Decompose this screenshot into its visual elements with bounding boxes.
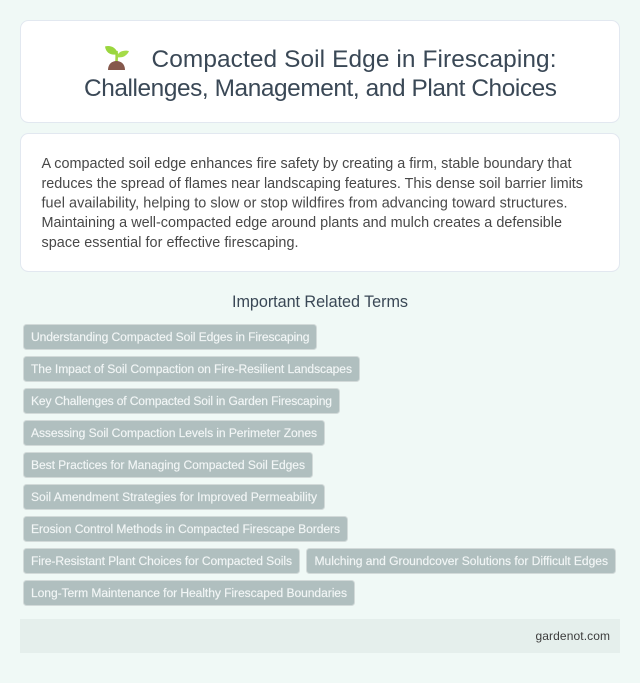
tag — [24, 420, 324, 446]
text block: description: reduces the spread of flames near landscaping features. This dense soil barrier limits — [42, 176, 583, 192]
tag: Best Practices for Managing Compacted Soil Edges — [31, 458, 305, 472]
text block: description: A compacted soil edge enhances fire safety by creating a firm, stable boundary that — [42, 156, 572, 172]
tag — [24, 452, 312, 478]
tag — [24, 324, 316, 350]
tag: The Impact of Soil Compaction on Fire-Resilient Landscapes — [31, 362, 352, 376]
tag list — [24, 324, 616, 606]
icon: seedling — [105, 46, 129, 70]
title — [84, 46, 557, 102]
tag: Understanding Compacted Soil Edges in Firescaping — [31, 330, 310, 344]
text block: description: fuel availability, helping to slow or stop wildfires from advancing toward structures. — [42, 196, 568, 212]
text block: description — [42, 156, 583, 251]
panel: title card — [20, 20, 620, 122]
text block: description: space essential for effective firescaping. — [42, 235, 298, 251]
title: Compacted Soil Edge in Firescaping: — [152, 46, 556, 73]
tag — [24, 580, 354, 606]
tag: Soil Amendment Strategies for Improved Permeability — [31, 490, 318, 504]
tag: Mulching and Groundcover Solutions for Difficult Edges — [314, 554, 608, 568]
tag: Erosion Control Methods in Compacted Firescape Borders — [31, 522, 340, 536]
tag — [24, 356, 360, 382]
tag: Long-Term Maintenance for Healthy Firescaped Boundaries — [31, 586, 347, 600]
panel: description — [20, 134, 620, 272]
tag — [24, 388, 340, 414]
tag — [24, 484, 324, 510]
tag: Key Challenges of Compacted Soil in Garden Firescaping — [31, 394, 332, 408]
footer — [20, 619, 620, 653]
tag — [24, 548, 300, 574]
text block: description: Maintaining a well-compacted edge around plants and mulch creates a defensible — [42, 215, 562, 231]
tag — [306, 548, 616, 574]
tag: Fire-Resistant Plant Choices for Compacted Soils — [31, 554, 292, 568]
heading: related terms: Important Related Terms — [232, 293, 408, 311]
tag: Assessing Soil Compaction Levels in Perimeter Zones — [31, 426, 317, 440]
title: Challenges, Management, and Plant Choices — [84, 75, 557, 102]
footer: gardenot.com — [536, 629, 610, 643]
tag — [24, 516, 348, 542]
